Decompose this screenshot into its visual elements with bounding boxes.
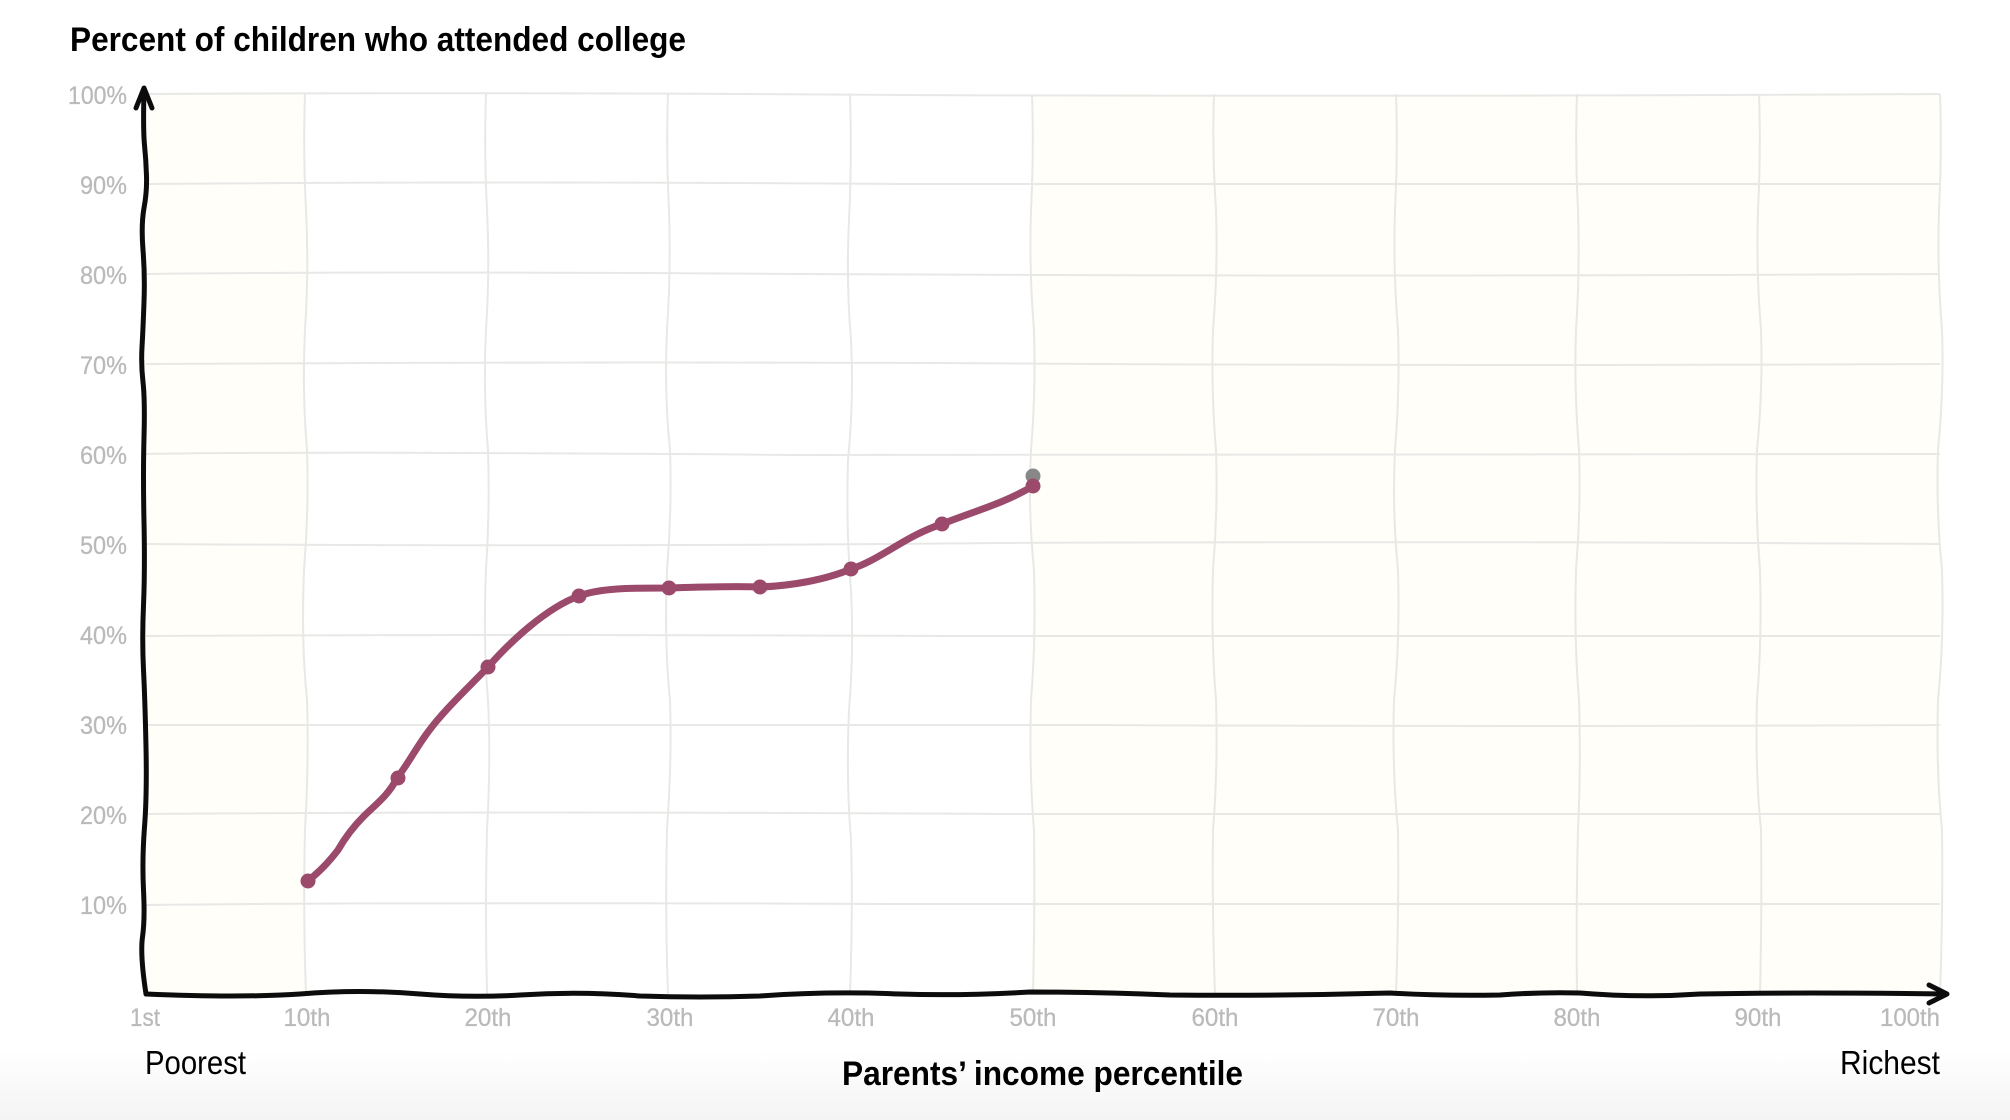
label: richest: Richest [1840, 1044, 1940, 1081]
y axis labels: 90% [80, 172, 127, 200]
shaded band: poorest [145, 94, 305, 994]
x axis labels: 30th [646, 1004, 694, 1032]
y axis labels [68, 82, 127, 920]
y axis arrow [136, 88, 152, 994]
x axis labels: 10th [284, 1004, 330, 1032]
grid lines [146, 93, 1942, 994]
y axis labels: 20% [80, 802, 127, 830]
x axis labels: 1st [130, 1004, 160, 1032]
y axis labels: 40% [80, 622, 127, 650]
x axis labels: 100th [1880, 1004, 1940, 1032]
x axis labels [130, 1004, 1940, 1032]
x axis title: Parents’ income percentile [842, 1055, 1243, 1093]
x axis labels: 20th [464, 1004, 512, 1032]
y axis labels: 70% [80, 352, 127, 380]
y axis labels: 10% [80, 892, 127, 920]
x axis labels: 40th [828, 1004, 874, 1032]
x axis labels: 60th [1192, 1004, 1238, 1032]
x axis arrow [146, 985, 1947, 1003]
y axis labels: 30% [80, 712, 127, 740]
label: poorest: Poorest [145, 1044, 246, 1081]
y axis labels: 60% [80, 442, 127, 470]
y axis labels: 50% [80, 532, 127, 560]
x axis labels: 90th [1734, 1004, 1782, 1032]
x axis labels: 70th [1372, 1004, 1420, 1032]
y axis labels: 80% [80, 262, 127, 290]
grey reference dot [1026, 468, 1040, 484]
shaded band: richest half [1032, 94, 1940, 994]
y axis labels: 100% [68, 82, 127, 110]
title: Percent of children who attended college [70, 21, 686, 59]
x axis labels: 80th [1554, 1004, 1600, 1032]
x axis labels: 50th [1010, 1004, 1056, 1032]
data line [300, 478, 1040, 888]
